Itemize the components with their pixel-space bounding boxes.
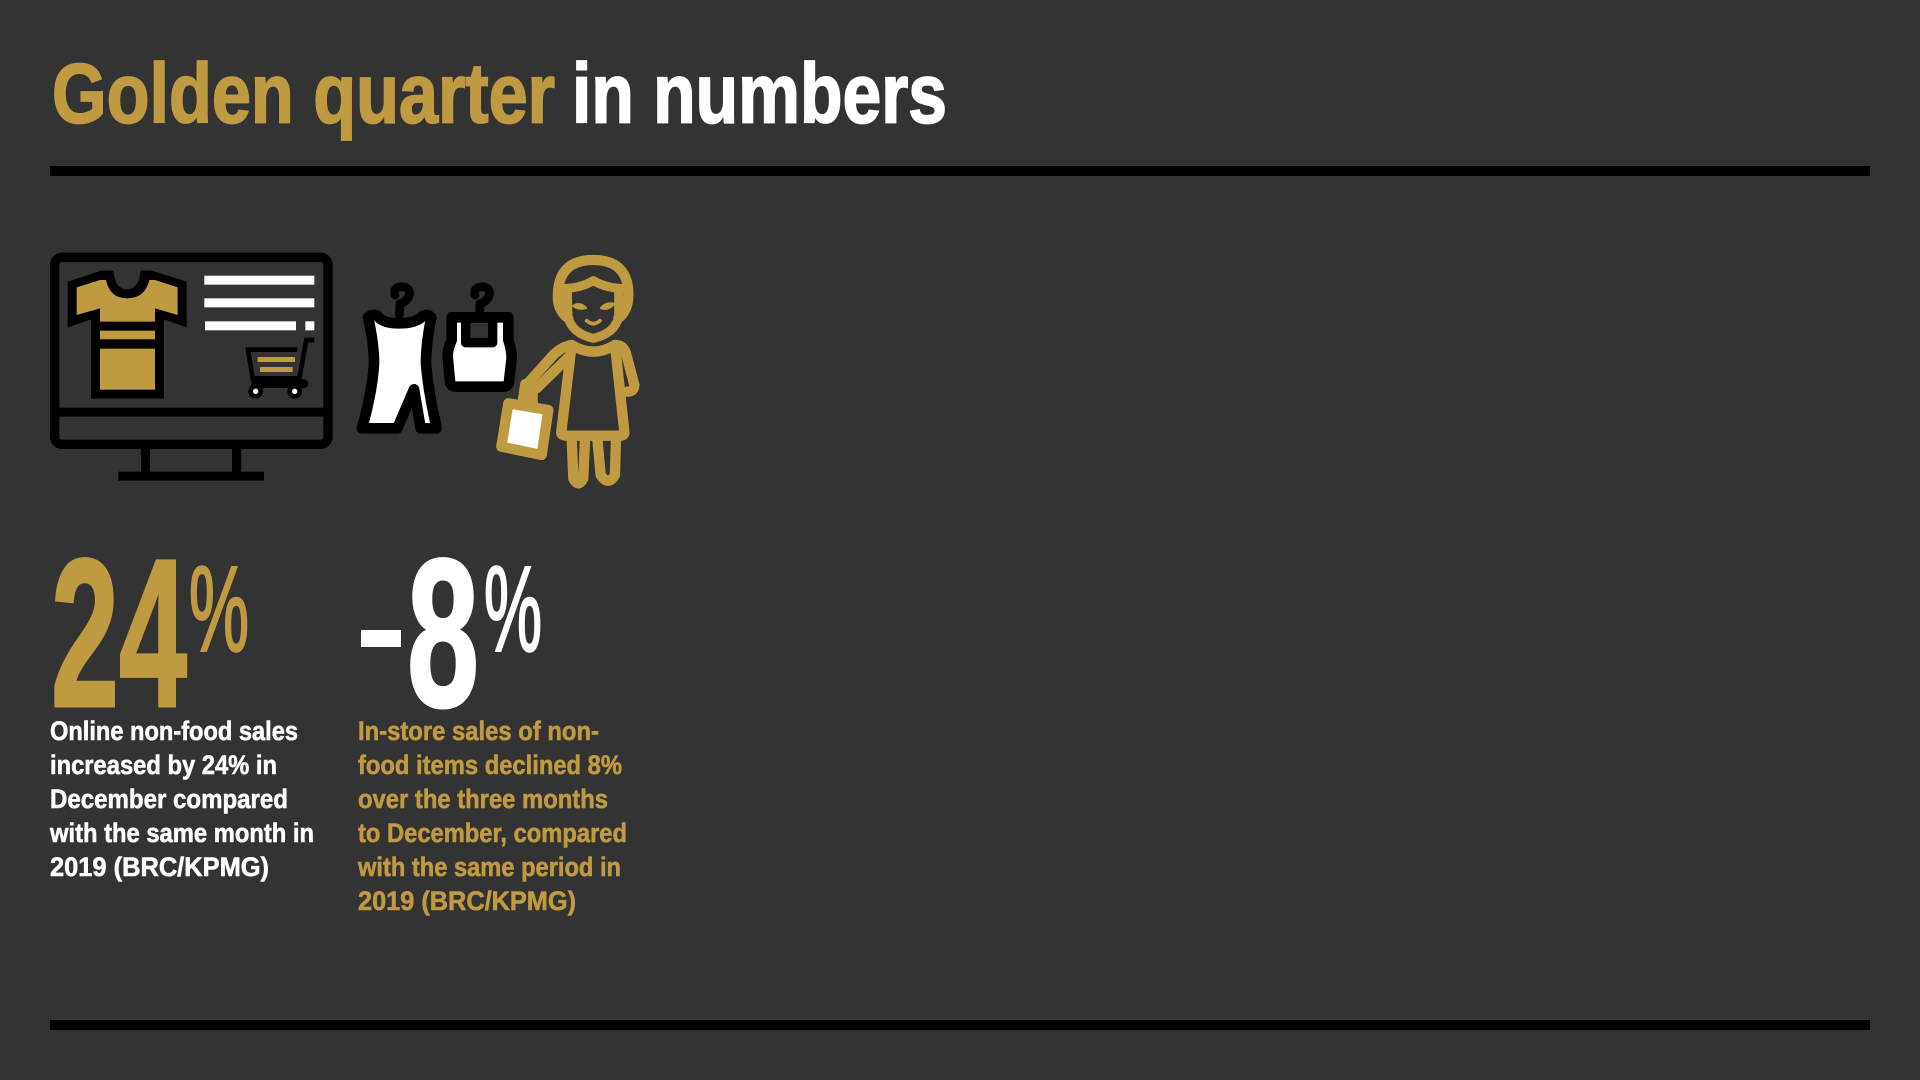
- text: online sales description: 2019 (BRC/KPMG): [50, 852, 269, 882]
- text: in-store sales description: over the three months: [358, 784, 608, 814]
- title: Golden quarter: [52, 46, 555, 140]
- text: in-store sales description: to December, compared: [358, 818, 627, 848]
- icon: top on hanger: [448, 287, 512, 387]
- icon: computer monitor with t-shirt and cart: [55, 257, 328, 481]
- title: in numbers: [572, 46, 947, 140]
- text: online sales description: increased by 24% in: [50, 750, 277, 780]
- text: online sales description: [49, 716, 314, 882]
- text: in-store sales description: with the same period in: [357, 852, 621, 882]
- stat: 24%: %: [189, 541, 249, 677]
- icon: shopper with bag: [501, 260, 634, 483]
- icon: shopping cart: [248, 340, 314, 399]
- stat: -8%: 8: [407, 515, 479, 751]
- title: [52, 46, 947, 140]
- text: online sales description: Online non-food sales: [50, 716, 298, 746]
- icon: dress on hanger: [362, 287, 437, 428]
- text: in-store sales description: In-store sales of non-: [358, 716, 599, 746]
- text: in-store sales description: [357, 716, 627, 916]
- stat: -8%: [361, 515, 542, 751]
- stat: 24%: 24: [51, 515, 187, 751]
- icon: clothes on hangers and shopper: [362, 260, 634, 483]
- text: online sales description: December compared: [50, 784, 288, 814]
- text: in-store sales description: 2019 (BRC/KPMG): [358, 886, 576, 916]
- stat: -8%: %: [484, 541, 542, 677]
- text: in-store sales description: food items declined 8%: [358, 750, 622, 780]
- icon: t-shirt: [68, 271, 187, 399]
- product text lines: [204, 276, 314, 330]
- text: online sales description: with the same month in: [49, 818, 314, 848]
